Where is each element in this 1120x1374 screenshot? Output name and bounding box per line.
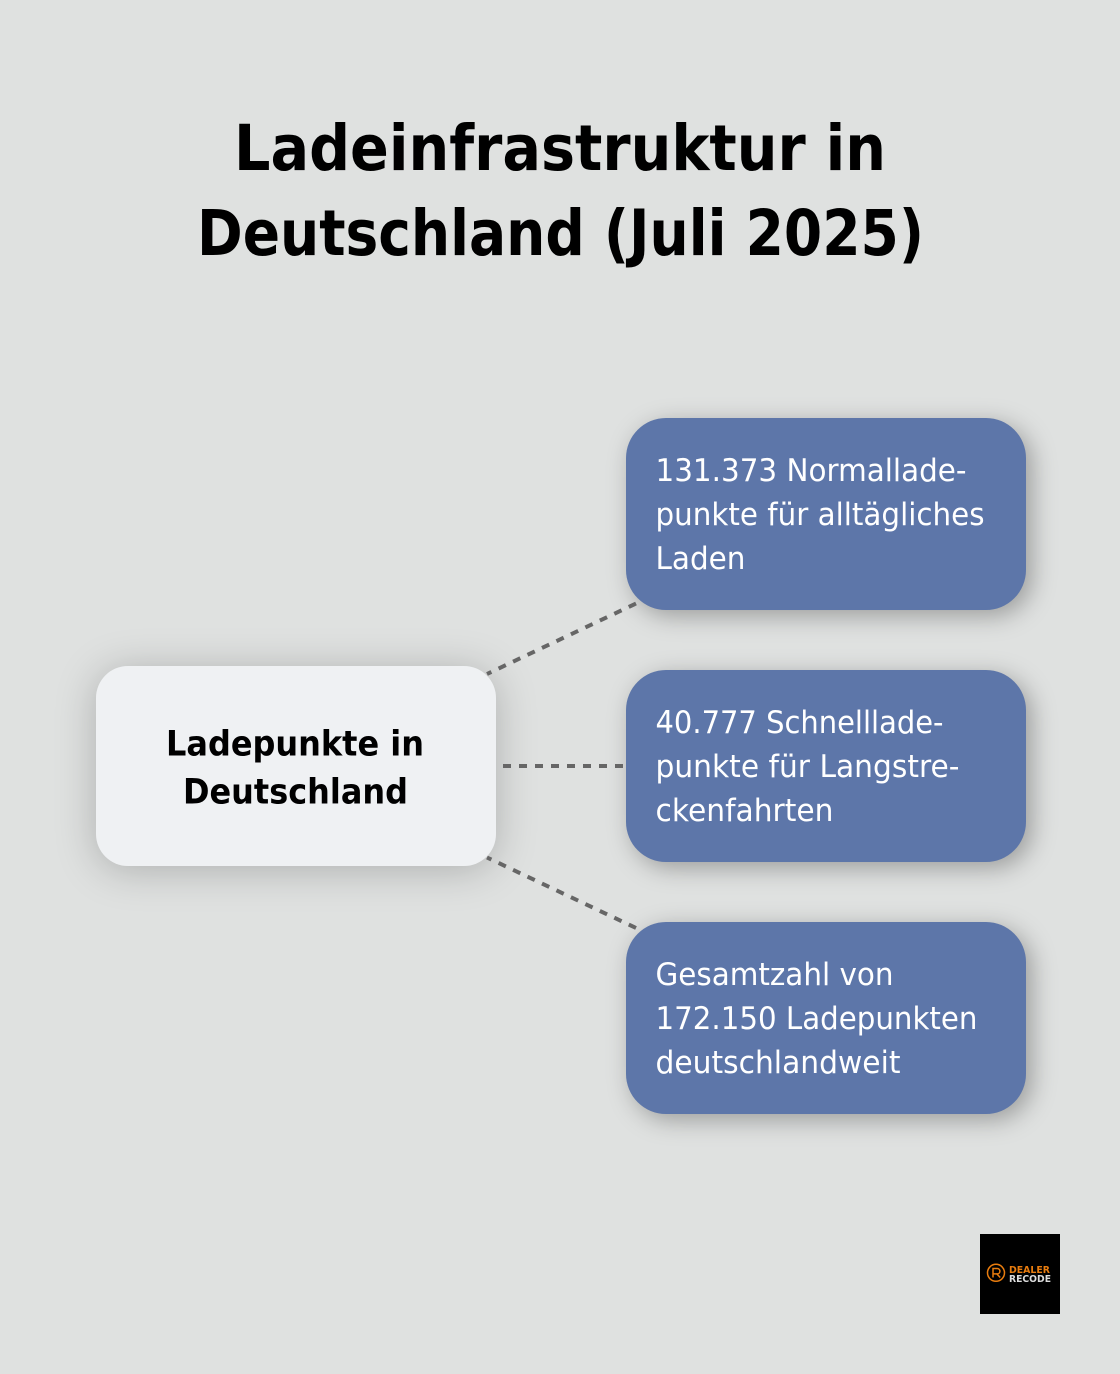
text: normal charging points: Laden <box>656 541 746 577</box>
logo: Dealer Recode: DEALER <box>1009 1265 1051 1276</box>
panel: center node <box>96 666 496 866</box>
text: fast charging points: 40.777 Schnelllade- <box>656 705 944 741</box>
center label: Deutschland <box>183 772 408 812</box>
text: normal charging points: 131.373 Normallade- <box>656 453 966 489</box>
connector: center to bottom box <box>487 858 636 928</box>
connector: center to middle box <box>503 764 623 768</box>
text: fast charging points <box>656 705 960 829</box>
center label: Ladepunkte in <box>166 724 424 764</box>
text: total charging points: deutschlandweit <box>656 1045 900 1081</box>
connector: center to top box <box>487 604 636 674</box>
title: Deutschland (Juli 2025) <box>197 197 924 270</box>
text: total charging points: Gesamtzahl von <box>656 957 894 993</box>
text: total charging points <box>656 957 978 1081</box>
text: normal charging points <box>656 453 984 577</box>
panel: fast charging points <box>626 670 1026 862</box>
panel: normal charging points <box>626 418 1026 610</box>
text: fast charging points: ckenfahrten <box>656 793 834 829</box>
title: Ladeinfrastruktur in <box>234 112 886 185</box>
logo: Dealer Recode: RECODE <box>1009 1274 1051 1285</box>
text: normal charging points: punkte für alltägliches <box>656 497 984 533</box>
icon: R in circle <box>988 1264 1004 1281</box>
center label <box>166 724 424 812</box>
logo: Dealer Recode <box>980 1234 1060 1314</box>
text: total charging points: 172.150 Ladepunkten <box>656 1001 978 1037</box>
title <box>197 112 924 270</box>
panel: total charging points <box>626 922 1026 1114</box>
text: fast charging points: punkte für Langstre- <box>656 749 960 785</box>
